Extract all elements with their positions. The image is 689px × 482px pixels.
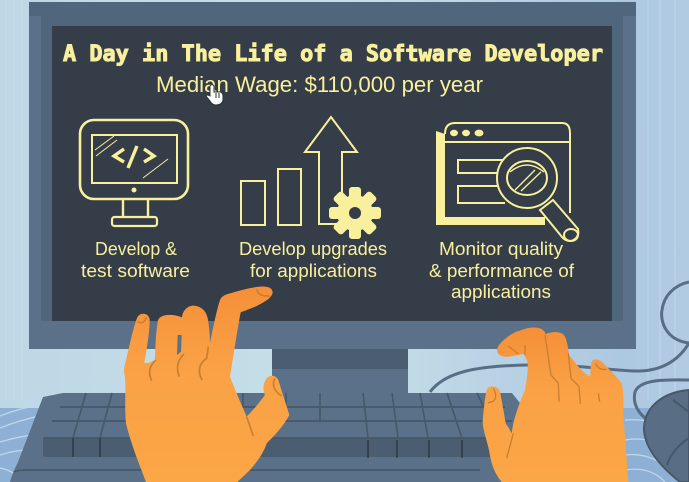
desk — [0, 405, 689, 482]
screen — [52, 26, 612, 321]
caption: develop and test software: Develop & — [95, 238, 178, 259]
mouse — [644, 390, 689, 482]
caption: monitor quality and performance of applications: Monitor quality — [439, 238, 564, 259]
icon: rising bars with arrow and gear — [241, 117, 381, 239]
caption: monitor quality and performance of applications — [429, 238, 575, 302]
monitor — [29, 2, 636, 349]
mouse cables — [430, 282, 689, 420]
monitor stand — [272, 349, 408, 394]
right hand — [483, 327, 628, 482]
icon: computer with code — [80, 120, 188, 226]
title: A Day in The Life of a Software Developer — [63, 42, 603, 67]
caption: develop and test software — [81, 238, 190, 281]
icon: gear — [329, 187, 381, 239]
keyboard — [10, 393, 543, 482]
caption: develop upgrades for applications — [239, 238, 387, 281]
left hand — [124, 287, 289, 482]
caption: develop and test software: test software — [81, 260, 190, 281]
caption: monitor quality and performance of applications: & performance of — [429, 260, 575, 281]
caption: monitor quality and performance of applications: applications — [451, 281, 551, 302]
icon: browser window with magnifier — [436, 123, 578, 241]
subtitle: median wage: Median Wage: $110,000 per year — [156, 72, 483, 97]
icon: hand cursor — [206, 84, 223, 105]
caption: develop upgrades for applications: Develop upgrades — [239, 238, 387, 259]
caption: develop upgrades for applications: for applications — [250, 260, 377, 281]
